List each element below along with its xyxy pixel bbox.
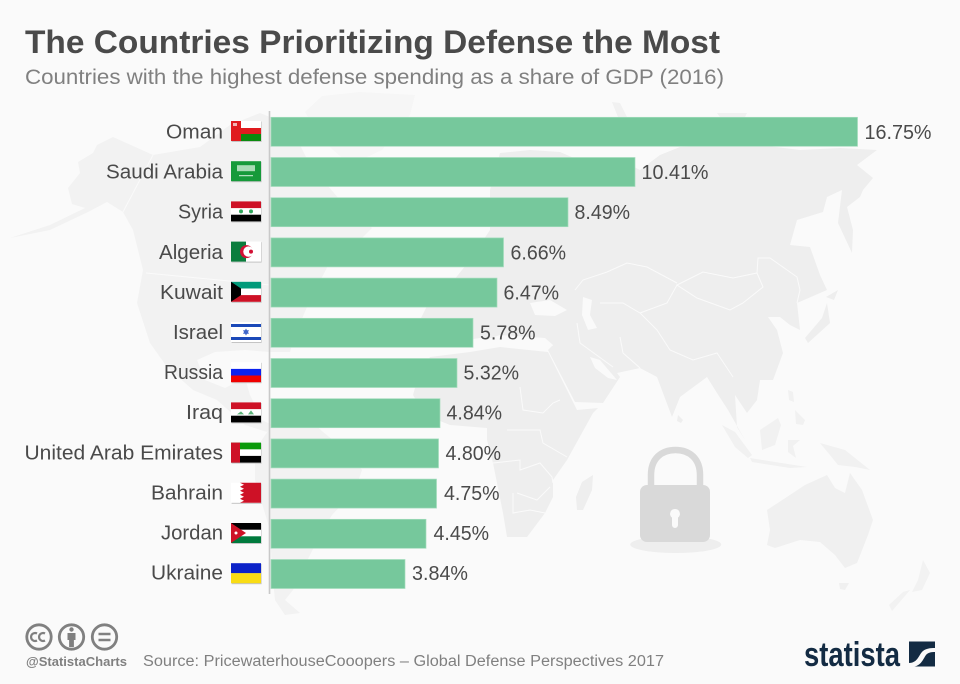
row: Ukraine	[151, 560, 468, 588]
row: Oman	[166, 117, 932, 146]
flag: Iraq	[231, 402, 262, 423]
row: Saudi Arabia: 10.41%	[642, 162, 709, 184]
row: United Arab Emirates: United Arab Emirates	[24, 442, 223, 464]
row: Jordan	[161, 519, 489, 548]
source: Source: PricewaterhouseCooopers – Global Defense Perspectives 2017	[143, 653, 664, 670]
flag: Israel	[231, 322, 262, 343]
row: Kuwait: Kuwait	[160, 282, 223, 304]
row: Ukraine: Ukraine	[151, 563, 223, 585]
row: Jordan: Jordan	[161, 522, 223, 544]
icon: creative commons	[27, 625, 117, 649]
row: United Arab Emirates: 4.80%	[446, 443, 501, 465]
row: Bahrain	[151, 479, 500, 508]
map borders	[123, 155, 800, 513]
flag: Kuwait	[231, 282, 262, 303]
row: Bahrain: Bahrain	[151, 482, 223, 504]
row: Syria	[178, 198, 630, 227]
row: Bahrain: 4.75%	[444, 483, 500, 505]
handle: @StatistaCharts	[26, 655, 127, 669]
world map background	[10, 92, 930, 615]
row: Syria: Syria	[178, 202, 224, 224]
axis line	[269, 111, 270, 594]
row: Saudi Arabia	[106, 158, 709, 186]
row: United Arab Emirates	[24, 439, 501, 468]
row: Saudi Arabia: Saudi Arabia	[106, 162, 224, 184]
flag: Jordan	[231, 523, 262, 544]
flag: United Arab Emirates	[231, 443, 262, 464]
logo: statista: statista	[804, 636, 901, 674]
row: Oman: 16.75%	[864, 122, 932, 144]
row: Iraq: Iraq	[186, 402, 223, 424]
row: Israel: 5.78%	[480, 322, 536, 344]
row: Jordan: 4.45%	[434, 523, 489, 545]
row: Israel: Israel	[173, 322, 223, 344]
title: The Countries Prioritizing Defense the Most	[25, 24, 720, 60]
flag: Syria	[231, 201, 262, 222]
row: Ukraine: 3.84%	[412, 563, 468, 585]
flag: Russia	[231, 362, 262, 383]
row: Iraq: 4.84%	[446, 403, 502, 425]
inland seas	[430, 297, 617, 380]
flag: Ukraine	[231, 563, 262, 584]
row: Russia	[164, 358, 519, 388]
row: Oman: Oman	[166, 122, 223, 144]
flag: Algeria	[231, 242, 262, 263]
row: Kuwait: 6.47%	[504, 282, 559, 304]
row: Kuwait	[160, 278, 559, 307]
row: Syria: 8.49%	[574, 202, 630, 224]
row: Russia: Russia	[164, 362, 224, 384]
flag: Bahrain	[231, 483, 262, 504]
row: Iraq	[186, 399, 502, 428]
row: Israel	[173, 318, 536, 347]
flag: Saudi Arabia	[231, 161, 262, 182]
row: Algeria	[159, 238, 566, 267]
flag: Oman	[231, 121, 262, 142]
icon: padlock	[630, 450, 721, 553]
row: Russia: 5.32%	[464, 363, 519, 385]
subtitle: Countries with the highest defense spending as a share of GDP (2016)	[25, 65, 724, 89]
row: Algeria: 6.66%	[510, 242, 566, 264]
row: Algeria: Algeria	[159, 242, 224, 264]
bar chart	[24, 117, 932, 589]
